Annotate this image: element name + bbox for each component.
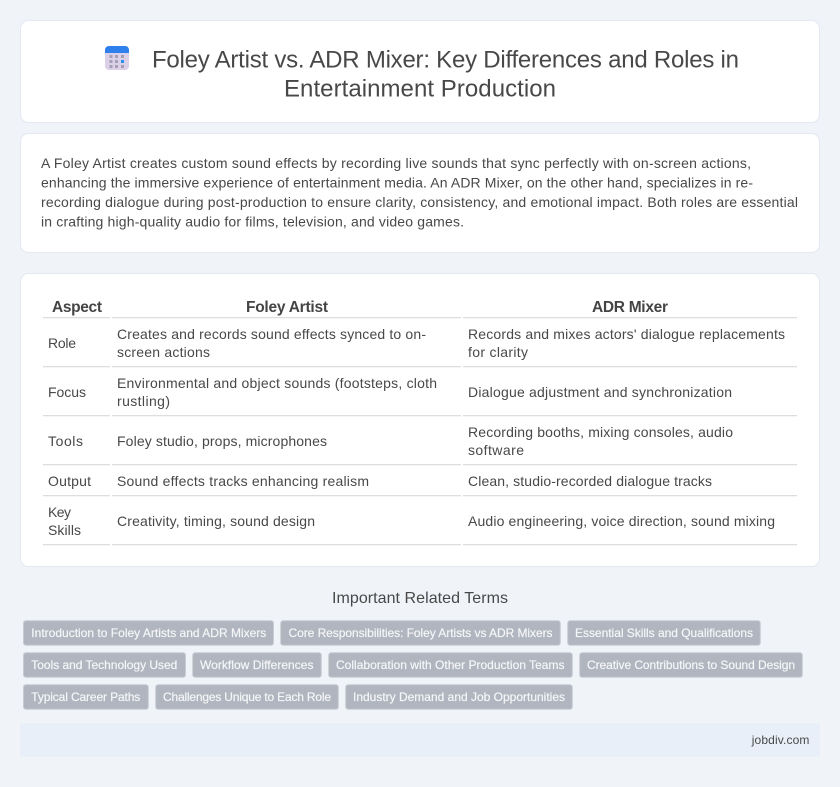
table header row: Aspect [52,299,102,316]
related terms tags: Collaboration with Other Production Teams [336,658,564,672]
related terms tags: Challenges Unique to Each Role [163,690,331,704]
table row: key skills: Key [48,504,71,520]
related terms tags: Workflow Differences [200,658,314,672]
related terms tags: Core Responsibilities: Foley Artists vs ADR Mixers [288,626,552,640]
related terms tags: Creative Contributions to Sound Design [587,658,795,672]
table row: key skills: Audio engineering, voice direction, sound mixing [468,513,775,529]
table row: tools: Tools [48,433,83,449]
table row: focus: Dialogue adjustment and synchronization [468,384,732,400]
table header row [52,299,668,316]
table row: role: Role [48,335,76,351]
table row: tools: software [468,442,524,458]
table row: output: Sound effects tracks enhancing realism [117,473,369,489]
text block: introduction: enhancing the immersive experience of entertainment media. An ADR Mixer, on the other hand, specializes in re- [41,174,753,190]
table row: role: Creates and records sound effects synced to on- [117,326,426,342]
table row: role: screen actions [117,344,210,360]
text block: introduction [41,155,798,230]
table row: key skills [48,504,775,538]
related terms tags: Introduction to Foley Artists and ADR Mixers [31,626,266,640]
title [152,46,739,102]
table row: tools: Recording booths, mixing consoles, audio [468,424,733,440]
table row: role: for clarity [468,344,528,360]
table row: key skills: Creativity, timing, sound design [117,513,315,529]
table row: focus [48,375,732,409]
text block: introduction: A Foley Artist creates custom sound effects by recording live sounds that sync perfectly with on-screen actions, [41,155,751,171]
text block: introduction: in crafting high-quality audio for films, television, and video games. [41,214,464,230]
title: Foley Artist vs. ADR Mixer: Key Differences and Roles in [152,46,739,73]
panel: title card [20,20,820,122]
related terms tags: Typical Career Paths [31,690,140,704]
related terms tags: Industry Demand and Job Opportunities [353,690,565,704]
table row: output: Clean, studio-recorded dialogue tracks [468,473,712,489]
table header row: Foley Artist [246,299,328,316]
related terms tags: Tools and Technology Used [31,658,177,672]
table header row: ADR Mixer [592,299,668,316]
heading: important related terms: Important Related Terms [332,590,508,607]
footer [20,723,820,757]
related terms tags [24,621,802,709]
text block: introduction: recording dialogue during post-production to ensure clarity, consistency, and emotional impact. Both roles are essential [41,194,798,210]
related terms tags: Essential Skills and Qualifications [575,626,753,640]
table row: key skills: Skills [48,522,81,538]
table row: focus: Environmental and object sounds (footsteps, cloth [117,375,437,391]
panel: comparison table [20,274,820,566]
icon: calendar [105,46,129,70]
footer: jobdiv.com [751,733,809,747]
title: Entertainment Production [284,75,556,102]
table row: tools: Foley studio, props, microphones [117,433,327,449]
table row: role: Records and mixes actors' dialogue replacements [468,326,785,342]
panel: introduction [20,134,820,252]
table row: output [48,473,712,489]
table row: tools [48,424,733,458]
table row: focus: Focus [48,384,86,400]
table row: focus: rustling) [117,393,170,409]
table row: role [48,326,785,360]
table row: output: Output [48,473,91,489]
